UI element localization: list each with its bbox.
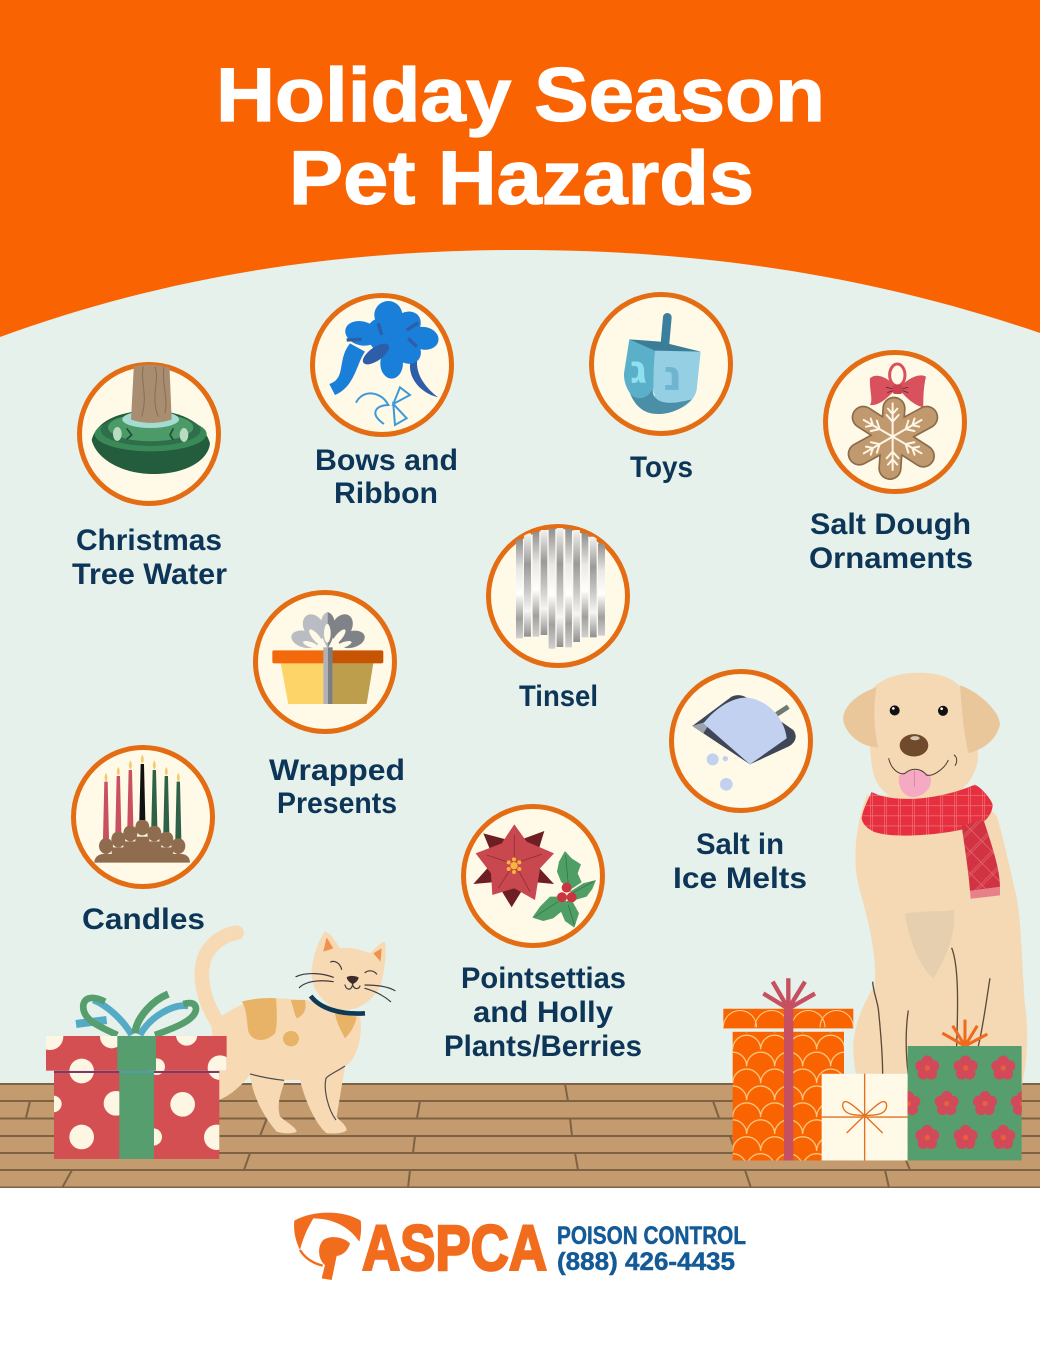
icon: dreidel	[624, 317, 701, 414]
cat	[202, 932, 395, 1134]
label	[72, 524, 227, 591]
label	[444, 962, 642, 1063]
label: and Holly	[473, 996, 613, 1029]
icon: tree stand	[92, 363, 210, 474]
gift: green with red flowers	[908, 1020, 1022, 1160]
panel: poinsettias and holly	[444, 806, 642, 1063]
icon: blue bow	[329, 301, 440, 425]
icon: dreidel: ג	[630, 348, 647, 393]
label: Wrapped	[269, 754, 405, 787]
label: Ornaments	[809, 542, 973, 575]
panel: christmas tree water	[72, 363, 227, 591]
poison control text: POISON CONTROL	[557, 1222, 746, 1250]
icon: aspca shield	[294, 1213, 361, 1280]
wordmark: ASPCA	[362, 1212, 547, 1284]
logo: aspca poison control	[294, 1212, 746, 1284]
panel: bows and ribbon	[312, 296, 458, 510]
label: Plants/Berries	[444, 1030, 642, 1063]
label	[809, 508, 973, 575]
gift: cream with orange bow	[822, 1074, 908, 1160]
footer panel	[0, 1188, 1040, 1363]
label: Ribbon	[334, 477, 438, 510]
label: Tinsel	[519, 680, 598, 713]
panel: toys	[592, 294, 730, 484]
icon: dreidel: נ	[663, 351, 682, 400]
panel: salt in ice melts	[672, 672, 810, 895]
icon: gift box	[272, 610, 383, 704]
label: Tree Water	[72, 558, 227, 591]
panel: salt dough ornaments	[809, 352, 973, 575]
gift: orange scale pattern	[723, 978, 853, 1160]
title: Pet Hazards	[289, 136, 754, 221]
label	[269, 754, 405, 820]
title	[216, 53, 825, 221]
panel: candles	[74, 748, 212, 936]
panel: tinsel	[488, 526, 628, 713]
label: Ice Melts	[673, 862, 807, 895]
icon: poinsettia and holly	[473, 824, 596, 928]
icon: salt scoop	[692, 695, 796, 791]
label	[315, 444, 458, 510]
label: Toys	[630, 451, 693, 484]
label: Christmas	[76, 524, 222, 557]
wooden floor	[0, 1083, 1040, 1188]
title: Holiday Season	[216, 53, 825, 138]
icon: tinsel strands	[516, 528, 605, 649]
orange header band	[0, 0, 1040, 337]
icon: snowflake ornament	[859, 364, 927, 470]
dog	[843, 673, 1027, 1087]
label: Bows and	[315, 444, 458, 477]
label	[673, 828, 807, 895]
panel: wrapped presents	[256, 592, 405, 820]
poison control text	[557, 1222, 746, 1276]
label: Salt in	[696, 828, 784, 861]
label: Salt Dough	[810, 508, 971, 541]
poison control text: (888) 426-4435	[557, 1248, 735, 1276]
label: Presents	[277, 787, 397, 820]
gift: red polka dot	[37, 994, 232, 1159]
label: Pointsettias	[461, 962, 626, 995]
label: Candles	[82, 903, 205, 936]
icon: kinara	[94, 754, 190, 863]
